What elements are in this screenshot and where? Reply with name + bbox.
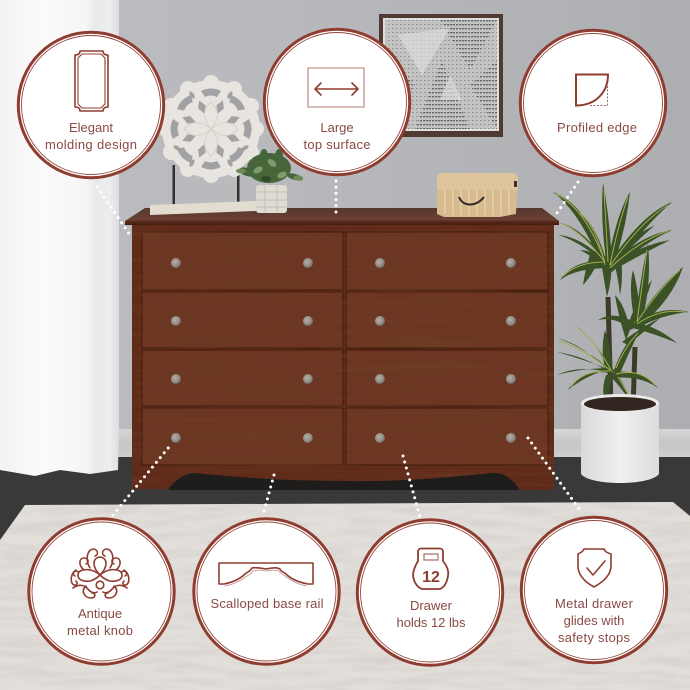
white pot [581, 403, 659, 483]
curtain [0, 0, 119, 476]
label: Antique [78, 606, 122, 621]
room background: wall [0, 0, 690, 460]
callout: elegant molding design [18, 32, 164, 178]
callout: profiled edge [520, 30, 666, 176]
drawers [142, 232, 548, 465]
potted plant on dresser [236, 149, 304, 213]
dotted leader lines [97, 181, 582, 517]
callout: scalloped base rail [194, 519, 339, 664]
icon: kettlebell weight [413, 548, 448, 589]
icon: ornate knob [71, 549, 129, 598]
decorative medallion on stand [150, 75, 264, 215]
rug [0, 502, 690, 690]
label: Scalloped base rail [210, 596, 324, 611]
icon: base rail outline [219, 563, 313, 586]
dresser under shadow [168, 473, 520, 490]
label: Elegant [69, 120, 113, 135]
icon: molding frame [75, 51, 108, 111]
label: Profiled edge [557, 120, 637, 135]
label: Large [320, 120, 354, 135]
callout: metal drawer glides with safety stops [521, 517, 667, 663]
callout: drawer holds 12 lbs [357, 520, 503, 665]
framed wall art [379, 14, 503, 137]
callout: metal drawer glides with safety stops: safety stops [558, 630, 630, 645]
dresser top [125, 208, 559, 225]
floor plant in white pot [553, 183, 689, 483]
dresser [125, 208, 559, 490]
label: Drawer [410, 598, 453, 613]
plant leaf stripes [556, 190, 685, 406]
icon: kettlebell weight: 12 [422, 569, 440, 586]
baseboard [118, 429, 690, 458]
callout: large top surface: top surface [304, 137, 370, 152]
callout: large top surface [264, 29, 410, 175]
wicker box [437, 173, 518, 217]
plant trunks [608, 297, 635, 410]
plant leaves [553, 183, 689, 410]
callout: elegant molding design: molding design [45, 137, 137, 152]
knobs [171, 258, 516, 443]
callout: metal drawer glides with safety stops: glides with [564, 613, 624, 628]
callout: antique metal knob: metal knob [67, 623, 133, 638]
dark floor [0, 457, 690, 547]
callout: drawer holds 12 lbs: holds 12 lbs [396, 615, 466, 630]
label: Metal drawer [555, 596, 634, 611]
wood grain [132, 224, 554, 486]
callout: antique metal knob [29, 519, 174, 664]
icon: surface arrow [308, 68, 364, 107]
icon: shield with check [578, 549, 611, 587]
icon: profiled corner [576, 74, 608, 106]
